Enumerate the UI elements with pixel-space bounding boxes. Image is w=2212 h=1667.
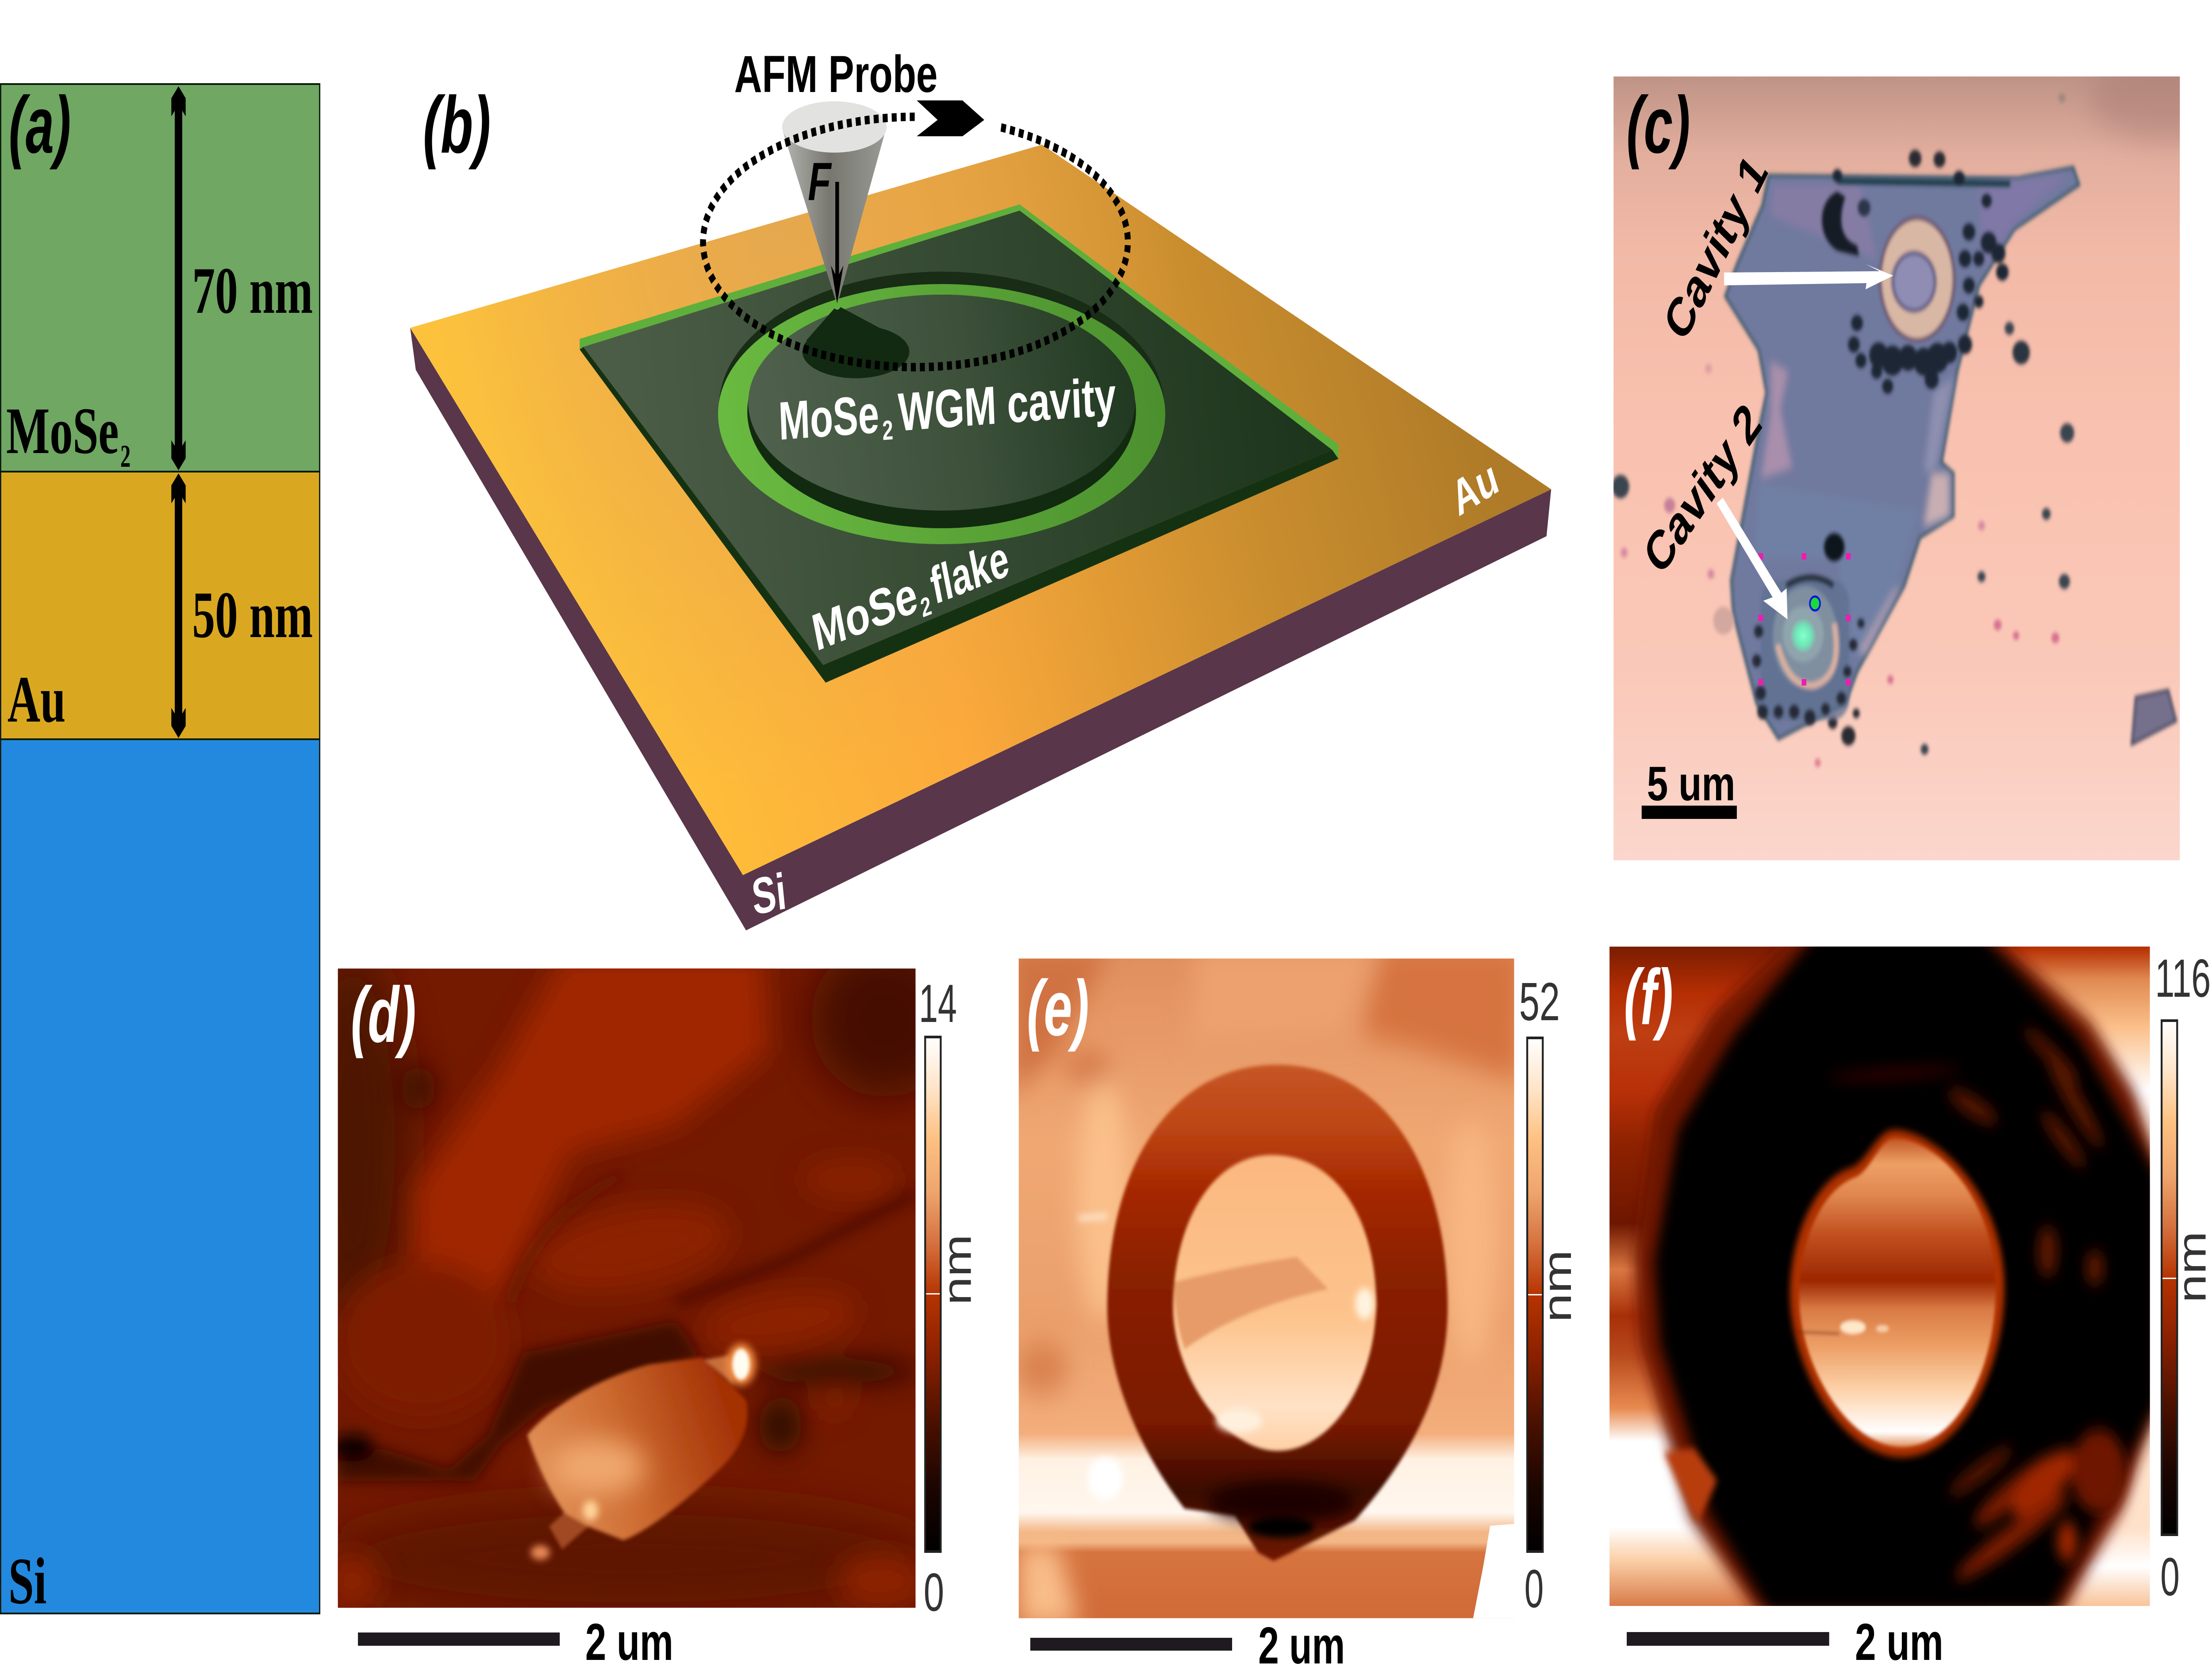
ridge edge xyxy=(331,1175,915,1481)
colorbar unit: nm xyxy=(1536,1250,1580,1322)
micrograph image xyxy=(1612,55,2212,860)
tip shadow xyxy=(803,305,909,378)
scale bar xyxy=(1030,1638,1232,1651)
scale bar xyxy=(1642,806,1737,819)
MoSe2 flake xyxy=(580,204,1338,683)
flake xyxy=(1725,168,2079,739)
scale bar xyxy=(1627,1632,1829,1646)
colorbar f xyxy=(2162,1021,2177,1535)
cavity disc xyxy=(1796,1138,1996,1447)
laser spot xyxy=(1790,618,1816,654)
arrow: cavity 1 xyxy=(1724,264,1893,289)
label: MoSe2 WGM cavity: MoSe xyxy=(778,384,880,452)
left lower ramp xyxy=(1664,1448,1717,1523)
colorbar unit: nm xyxy=(935,1234,979,1305)
label: MoSe2: 2 xyxy=(120,439,131,474)
panel label a: (a) xyxy=(9,81,71,170)
label: Si: Si xyxy=(8,1544,46,1618)
scan direction arrowhead xyxy=(917,100,984,136)
layer: Si xyxy=(0,739,320,1613)
label: Cavity 1: Cavity 1 xyxy=(1655,143,1775,351)
panel c: optical micrograph xyxy=(1612,55,2212,860)
cavity ring xyxy=(718,272,1165,544)
label: MoSe2 flake: flake xyxy=(926,529,1013,615)
panel label d: (d) xyxy=(351,971,416,1059)
arrow: cavity 2 xyxy=(1717,498,1787,619)
label: MoSe2 WGM cavity xyxy=(778,367,1117,454)
scale bar xyxy=(358,1632,560,1646)
arrow: 70 nm thickness xyxy=(171,86,186,470)
bright feature xyxy=(527,1355,747,1549)
colorbar e xyxy=(1527,1038,1543,1552)
cavity 2 xyxy=(1752,578,1864,725)
panel f: AFM map, deep ring xyxy=(1609,933,2212,1667)
label: Cavity 2: Cavity 2 xyxy=(1636,392,1769,585)
panel d: AFM map, before xyxy=(296,942,979,1667)
label: MoSe2 flake xyxy=(807,529,1014,664)
colorbar min: 0 xyxy=(924,1563,944,1623)
label: MoSe2 flake: MoSe xyxy=(807,565,922,662)
label: MoSe2 flake: 2 xyxy=(918,590,934,623)
cavity glow xyxy=(1790,1130,2005,1457)
debris and cavity 1 xyxy=(1612,93,2176,767)
height map e xyxy=(1010,947,1521,1627)
dotted scan path xyxy=(703,117,1128,367)
label: 50 nm: 50 nm xyxy=(192,578,313,652)
height map d xyxy=(296,942,959,1618)
colorbar d xyxy=(925,1037,941,1552)
panel e: AFM map, ring xyxy=(1010,947,1580,1667)
label: AFM Probe: AFM Probe xyxy=(734,45,937,103)
ripples in etched region xyxy=(1827,1022,2126,1588)
colorbar max: 14 xyxy=(919,974,957,1034)
panel label b: (b) xyxy=(423,81,491,170)
positioning markers xyxy=(1759,553,1851,686)
soft edge of etched region xyxy=(1635,938,2162,1612)
label: Au: Au xyxy=(8,663,65,737)
label: Si: Si xyxy=(749,863,789,926)
center marker xyxy=(1810,596,1820,611)
colorbar min: 0 xyxy=(1525,1559,1544,1619)
panel b: AFM probe over cavity schematic xyxy=(410,45,1551,930)
panel label e: (e) xyxy=(1027,964,1089,1052)
label: MoSe2: MoSe xyxy=(6,394,119,468)
label: MoSe2 WGM cavity: 2 xyxy=(882,415,894,446)
label: MoSe2 WGM cavity: WGM cavity xyxy=(897,367,1117,442)
force arrow xyxy=(831,182,843,303)
scale label: 5 um xyxy=(1647,757,1735,811)
layer: MoSe2 xyxy=(0,84,320,472)
substrate side: Si xyxy=(410,328,1551,930)
colorbar min: 0 xyxy=(2160,1547,2180,1607)
etched ring xyxy=(1107,1065,1448,1561)
cavity disc xyxy=(1173,1155,1376,1451)
panel a: layer stack xyxy=(0,81,320,1618)
panel label c: (c) xyxy=(1626,81,1690,170)
label: 70 nm: 70 nm xyxy=(192,254,313,328)
substrate top: Au xyxy=(410,145,1551,875)
panel label f: (f) xyxy=(1624,953,1673,1041)
label: Au: Au xyxy=(1446,449,1504,526)
height map f xyxy=(1609,933,2162,1612)
layer: Au xyxy=(0,472,320,739)
AFM probe cone xyxy=(782,101,887,310)
force label F: F xyxy=(808,152,832,212)
arrow: 50 nm thickness xyxy=(171,473,186,738)
colorbar max: 52 xyxy=(1519,972,1560,1032)
